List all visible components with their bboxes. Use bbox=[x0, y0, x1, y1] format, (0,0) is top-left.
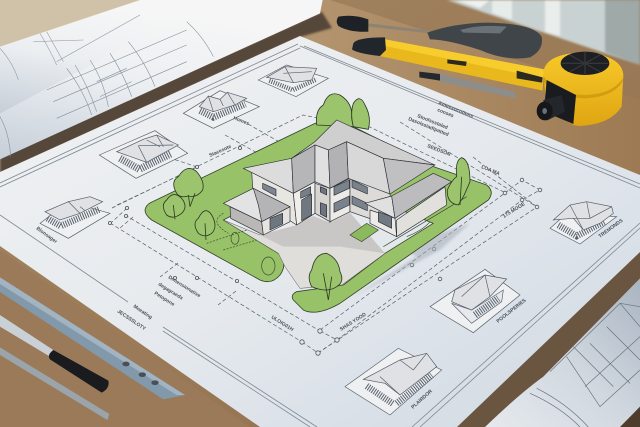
plan annotations bbox=[35, 100, 625, 410]
plan annotations: PLAIRDOR bbox=[410, 388, 434, 410]
driveway tree bbox=[309, 253, 342, 300]
plan annotations: SEEDSON bbox=[426, 143, 452, 158]
rolled blueprint, bottom right bbox=[485, 278, 640, 427]
steel ruler bbox=[0, 277, 185, 399]
house plan 6 bbox=[430, 269, 520, 333]
house plan 7 bbox=[345, 348, 442, 415]
small house plans bbox=[40, 65, 328, 238]
black handled tool bbox=[0, 315, 109, 393]
middle tree bbox=[195, 211, 215, 240]
plan annotations: 175 MOOE bbox=[502, 201, 527, 220]
steel rod bbox=[0, 347, 109, 420]
house bbox=[223, 120, 452, 237]
house plan 2 bbox=[183, 91, 259, 128]
lawn patch by porch bbox=[350, 223, 378, 242]
house shadow bbox=[353, 223, 470, 297]
dimension nodes bbox=[108, 146, 542, 355]
plan annotations: Dimensionative bbox=[167, 275, 202, 299]
plan annotations: POOLSPERIES bbox=[496, 297, 528, 325]
main roof bbox=[243, 120, 435, 194]
yellow level bbox=[352, 37, 544, 91]
dimension lines bbox=[110, 115, 540, 353]
pen bbox=[419, 72, 516, 98]
window background bbox=[447, 0, 640, 65]
path outlines in lawn bbox=[207, 197, 467, 275]
back roll drawing lines bbox=[0, 15, 140, 80]
plan annotations: ULOIG01H bbox=[270, 315, 295, 333]
plan annotations: Stacesote bbox=[208, 144, 233, 159]
plan annotations: cooses bbox=[436, 107, 455, 119]
site plan and house bbox=[145, 94, 491, 312]
front roll drawing lines bbox=[0, 22, 213, 157]
plan annotations: Meeating bbox=[132, 304, 153, 321]
back trees bbox=[316, 94, 369, 129]
driveway bbox=[223, 220, 385, 288]
lawn bbox=[145, 120, 491, 312]
plan annotations: Stoolssstaled bbox=[416, 113, 449, 131]
left porch bbox=[223, 188, 290, 235]
right wing bbox=[365, 173, 452, 237]
rolled blueprints, top left bbox=[0, 0, 323, 159]
plan annotations: Petopone bbox=[153, 291, 176, 308]
trees bbox=[163, 94, 470, 300]
left tree bbox=[174, 168, 203, 207]
desk tools, bottom left bbox=[0, 277, 185, 420]
plan annotations: Dasolssiadtpatted bbox=[407, 116, 449, 138]
plan annotations: Homes bbox=[232, 115, 250, 127]
plan annotations: TREMONDS bbox=[598, 218, 625, 240]
plan annotations: degagraeds bbox=[157, 282, 184, 302]
tape measure bbox=[537, 52, 623, 126]
house plan 4 bbox=[40, 197, 110, 238]
plan annotations: SHAS YOOD bbox=[339, 312, 368, 333]
plan annotations: JECSSSLOTY bbox=[116, 309, 147, 333]
plan annotations: LOA MA bbox=[480, 164, 501, 177]
plan annotations: Amessocotions bbox=[437, 100, 474, 120]
screwdriver bbox=[337, 16, 542, 59]
house plan 5 bbox=[550, 202, 617, 244]
house plan 3 bbox=[99, 131, 188, 178]
low tree bbox=[163, 195, 185, 219]
roll drawing lines bbox=[530, 303, 640, 427]
walls bbox=[252, 172, 393, 227]
house plan 1 bbox=[258, 65, 328, 97]
desk tools, top right bbox=[337, 16, 623, 126]
right tree bbox=[447, 158, 470, 205]
plan annotations: Blonsager bbox=[35, 226, 58, 245]
